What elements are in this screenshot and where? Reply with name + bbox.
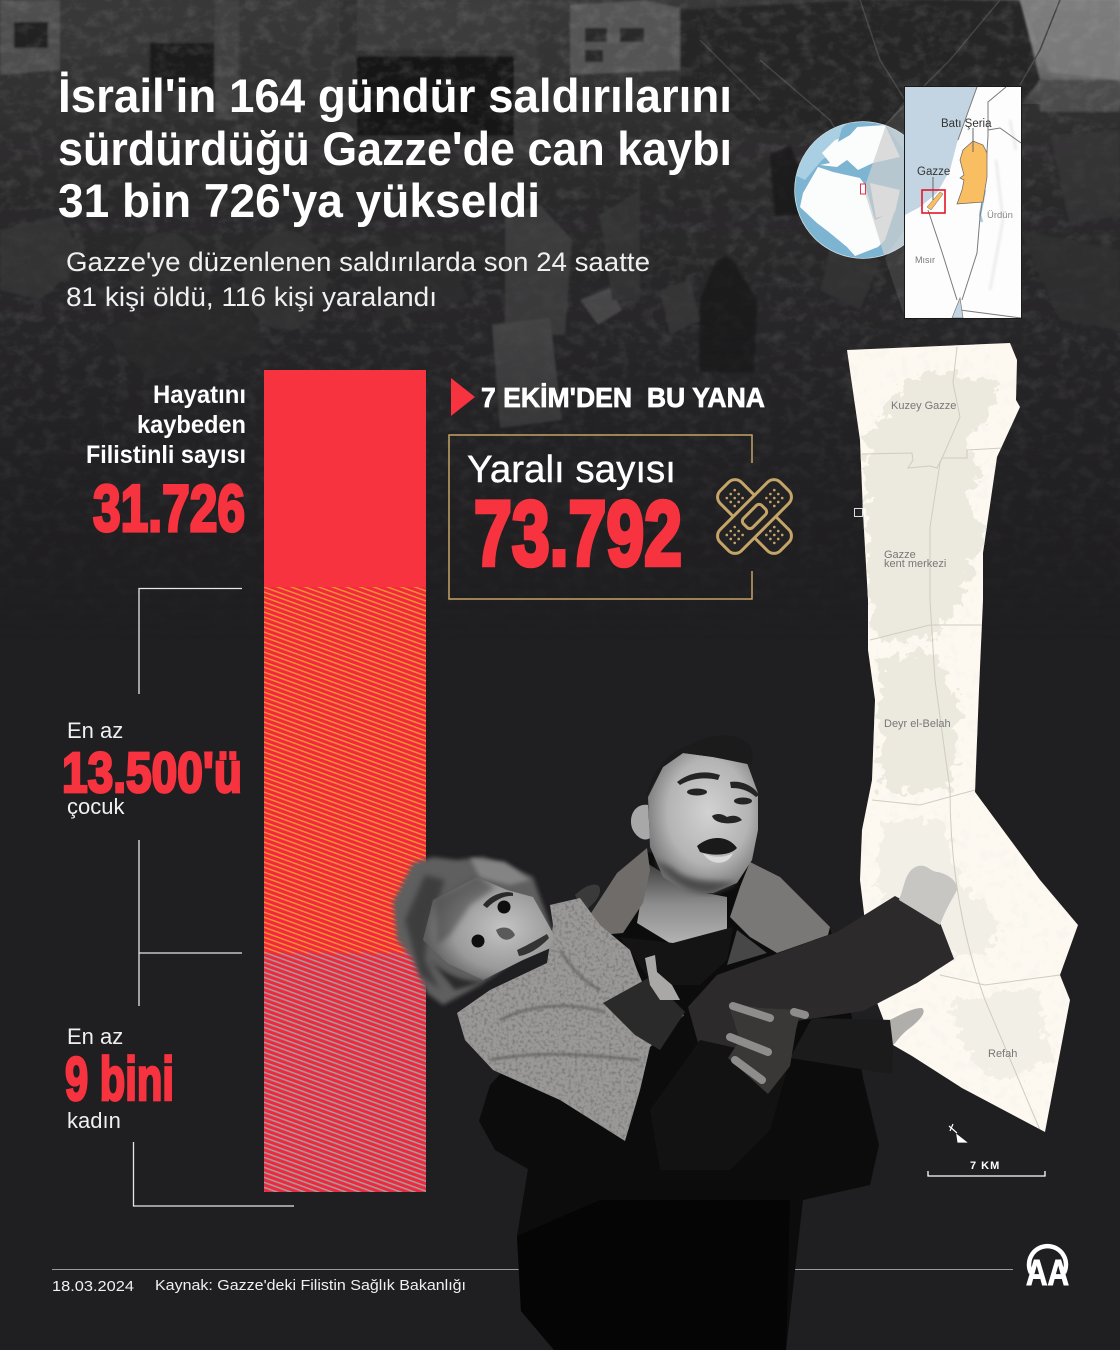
branches: [700, 0, 1061, 128]
subtitle: Gazze'ye düzenlenen saldırılarda son 24 saatte: [66, 247, 650, 277]
rubble texture: [0, 0, 1120, 518]
locator inset map: Batı Şeria: [941, 118, 992, 130]
label: killed Palestinians: Filistinli sayısı: [86, 441, 246, 469]
label: children: çocuk: [67, 794, 125, 819]
footer source: Kaynak: Gazze'deki Filistin Sağlık Bakanlığı: [155, 1277, 466, 1294]
facial features: [677, 772, 759, 855]
beam to inset: [885, 100, 931, 318]
shirt: [620, 927, 733, 985]
number: 31.726: 31.726: [93, 471, 245, 545]
label: women: 9 bini: [65, 1045, 174, 1113]
sky glow: [980, 0, 1120, 90]
ear: [631, 805, 650, 840]
label: killed Palestinians: Hayatını: [153, 381, 246, 409]
label: women: kadın: [67, 1108, 121, 1133]
coat inner lining: [727, 930, 767, 965]
panel: wounded: Yaralı sayısı: [467, 449, 676, 491]
jacket body: [479, 852, 879, 1350]
child's jumper: [457, 898, 684, 1141]
sleeve cuff: [603, 977, 685, 1050]
child's legs: [688, 896, 954, 1070]
title: [58, 69, 732, 227]
panel: wounded: [449, 435, 752, 599]
hair: [646, 736, 752, 797]
coat collar: [582, 848, 650, 935]
subtitle: [66, 247, 650, 312]
locator inset map: Gazze: [917, 166, 950, 178]
arrow: since 7 October: [451, 378, 475, 416]
subtitle: 81 kişi öldü, 116 kişi yaralandı: [66, 282, 437, 312]
map: Gaza Strip: Refah: [988, 1048, 1017, 1060]
man's thumb: [645, 955, 680, 1000]
child's feet: [899, 866, 957, 925]
West Bank: [957, 141, 987, 204]
figure: sack: [492, 318, 562, 428]
locator inset map: Ürdün: [987, 210, 1013, 221]
beam over globe: [866, 126, 904, 254]
bar segment: women: [264, 953, 426, 1192]
label: women: En az: [67, 1024, 123, 1049]
footer date: 18.03.2024: [52, 1278, 134, 1295]
background photo: destroyed buildings and rubble: [0, 0, 1120, 530]
label: women: [65, 1024, 174, 1133]
title: İsrail'in 164 gündür saldırılarını: [58, 69, 732, 122]
footer rule: [52, 1268, 1013, 1270]
label: killed Palestinians: kaybeden: [137, 411, 246, 439]
icon: crossed bandages: [714, 476, 795, 557]
panel: wounded: 73.792: [474, 483, 682, 585]
map: Gaza Strip: kent merkezi: [884, 558, 946, 570]
title: sürdürdüğü Gazze'de can kaybı: [58, 122, 732, 175]
locator inset map: Mısır: [915, 255, 935, 265]
figure: person: [700, 257, 757, 372]
heading: since 7 October: 7 EKİM'DEN BU YANA: [481, 382, 765, 413]
child's face: [423, 877, 553, 980]
map: Gaza Strip: Kuzey Gazze: [891, 400, 956, 412]
logo: AA: AA: [1026, 1252, 1069, 1293]
label: children: 13.500'ü: [62, 741, 242, 805]
bracket lines: [134, 588, 294, 1206]
label: children: En az: [67, 718, 123, 743]
label: killed Palestinians: [86, 381, 246, 469]
child's eyes, nose and mouth: [472, 892, 549, 956]
title: 31 bin 726'ya yükseldi: [58, 174, 540, 227]
map scale and north arrow: [928, 1124, 1045, 1176]
Gaza strip: [927, 192, 943, 210]
child's hair: [393, 857, 553, 1005]
label: children: [62, 718, 242, 819]
face: [648, 753, 758, 893]
photo: man carrying wounded child: [393, 736, 957, 1350]
man's hand: [728, 1003, 801, 1094]
locator globe: [794, 102, 904, 314]
figure: hooded person: [505, 205, 572, 335]
map: Gaza Strip: [840, 340, 1085, 1140]
rocks and barrels: [0, 130, 1120, 428]
man's hand behind jumper: [575, 885, 600, 912]
map: Gaza Strip: Gazze: [884, 549, 916, 561]
map scale and north arrow: 7 KM: [970, 1160, 1000, 1172]
bar: killed total and children: [264, 370, 426, 953]
neck: [637, 863, 727, 945]
locator inset map: [904, 86, 1022, 318]
map: Gaza Strip: Deyr el-Belah: [884, 718, 951, 730]
